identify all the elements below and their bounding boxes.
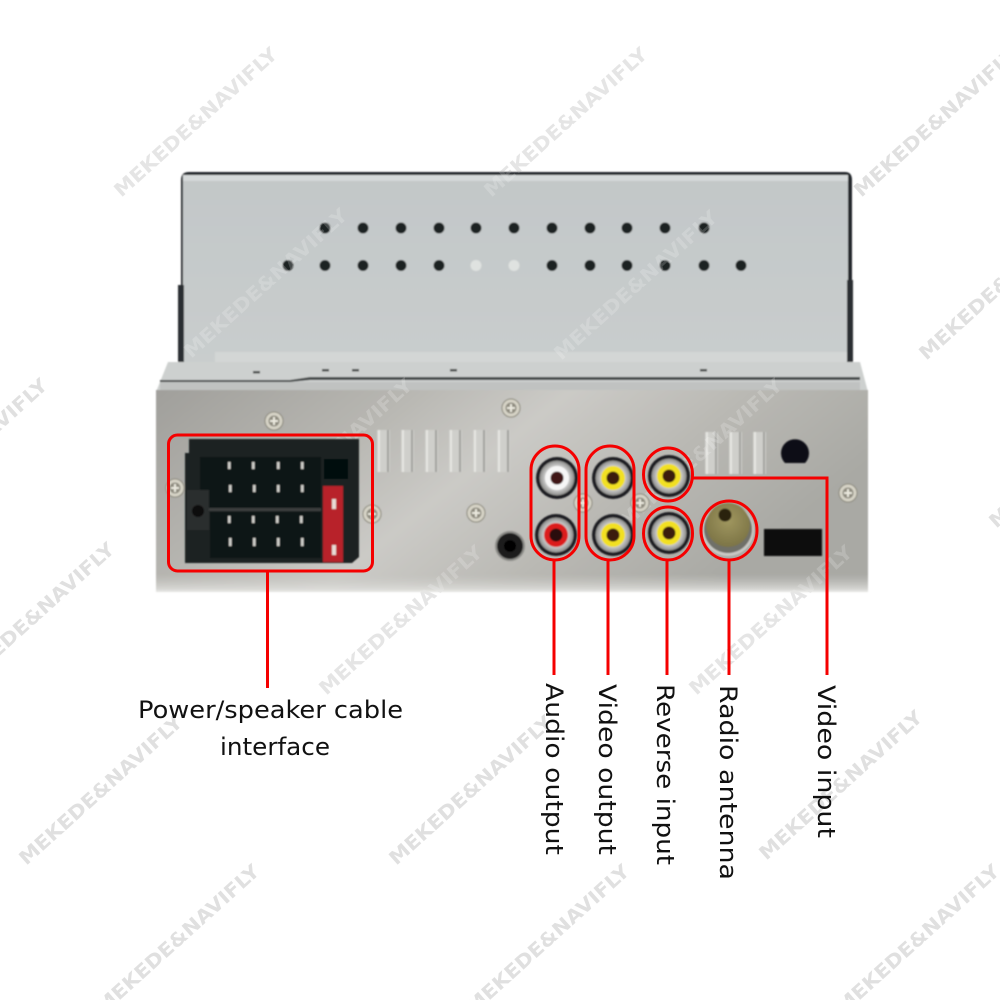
red fuse — [323, 486, 343, 562]
watermarks: MEKEDE&NAVIFLY — [385, 711, 557, 870]
jack: white — [536, 457, 578, 499]
callout: power/speaker interface — [168, 435, 372, 688]
jack: reverse input — [648, 512, 690, 554]
top sheet-metal strip — [156, 362, 868, 392]
watermarks: MEKEDE&NAVIFLY — [110, 43, 282, 202]
faint watermarks over the housing: MEKEDE&NAVIFLY — [615, 374, 787, 533]
faint watermarks over the housing: MEKEDE&NAVIFLY — [685, 541, 857, 700]
watermarks: MEKEDE&NAVIFLY — [685, 541, 857, 700]
faint watermarks over the housing: MEKEDE&NAVIFLY — [245, 374, 417, 533]
label: power/speaker cable interface: Power/speaker cable — [138, 696, 403, 724]
top cover plate — [178, 172, 853, 365]
callout: video output — [586, 446, 634, 675]
faint watermarks over the housing: MEKEDE&NAVIFLY — [180, 204, 352, 363]
label: power/speaker cable interface: interface — [220, 733, 330, 761]
panel hardware: connectors and screws — [166, 399, 857, 563]
jack: video output 2 — [592, 514, 634, 556]
jack: video input — [648, 455, 690, 497]
faint watermarks over the housing: MEKEDE&NAVIFLY — [315, 541, 487, 700]
power/speaker ISO connector — [185, 439, 359, 563]
screws — [166, 399, 857, 523]
callout: reverse input — [644, 507, 692, 675]
callout: audio output — [531, 446, 579, 675]
rear metal panel — [156, 390, 868, 590]
connector pins — [228, 462, 304, 546]
watermarks: MEKEDE&NAVIFLY — [480, 43, 652, 202]
callout: radio antenna — [701, 501, 757, 675]
faint watermarks over the housing: MEKEDE&NAVIFLY — [550, 206, 722, 365]
label: reverse input: Reverse input — [651, 684, 679, 865]
radio antenna socket — [702, 503, 754, 556]
watermarks: MEKEDE&NAVIFLY — [15, 711, 187, 870]
watermarks: MEKEDE&NAVIFLY — [755, 706, 927, 865]
mounting hole — [781, 439, 809, 463]
watermarks: MEKEDE&NAVIFLY — [315, 541, 487, 700]
RCA jacks — [535, 455, 690, 556]
label: video input: Video input — [812, 685, 840, 838]
label: audio output: Audio output — [540, 683, 568, 855]
faint watermarks over the housing: MEKEDE&NAVIFLY — [110, 43, 282, 202]
label: radio antenna: Radio antenna — [714, 685, 742, 880]
faint watermarks over the housing: MEKEDE&NAVIFLY — [480, 43, 652, 202]
car radio rear housing — [156, 172, 868, 592]
vent slots — [377, 430, 766, 474]
faint watermarks over the housing — [110, 43, 857, 700]
label: power/speaker cable interface — [138, 696, 403, 761]
label: video output: Video output — [593, 684, 621, 855]
rectangular port — [764, 529, 822, 556]
callout: video input — [644, 448, 827, 675]
jack: video output 1 — [592, 457, 634, 499]
ventilation holes — [282, 222, 746, 271]
jack: red — [535, 514, 577, 556]
headphone jack — [495, 531, 525, 561]
